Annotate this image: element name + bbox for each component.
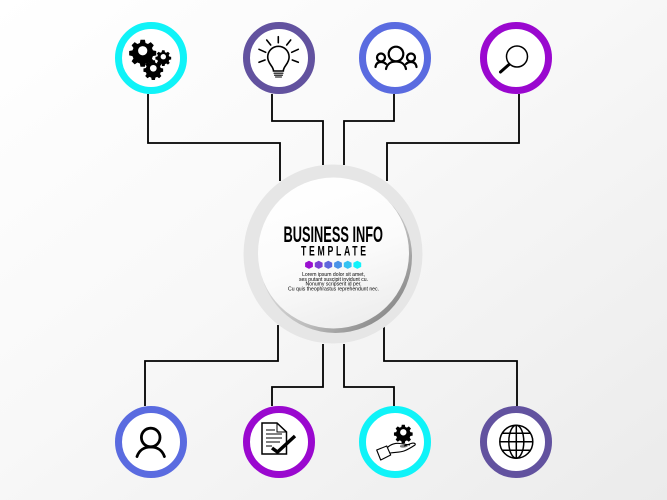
subtitle: TEMPLATE: [301, 244, 366, 259]
icon: people: [376, 47, 416, 69]
icon: magnifier: [500, 46, 528, 72]
icon: hand with gear: [377, 425, 415, 460]
icon: person: [137, 428, 164, 456]
body text: ses putant suscipit invidunt cu.: [299, 277, 368, 283]
icon: document with check: [262, 423, 295, 454]
icon: globe: [500, 425, 533, 458]
hexagon dots: [305, 261, 361, 269]
hub shadow crescent: [259, 180, 412, 333]
node: service: [362, 410, 428, 474]
node: document: [246, 410, 312, 474]
body text: Nonumy scripserit id per.: [305, 282, 362, 288]
title: BUSINESS INFO: [284, 222, 383, 247]
central hub: [244, 164, 422, 344]
icon: light bulb: [259, 37, 298, 77]
node: idea: [246, 26, 312, 90]
node: search: [484, 26, 548, 90]
node: gears: [118, 26, 184, 90]
outer hub ring: [244, 164, 422, 344]
node: user: [118, 410, 184, 474]
body text: Lorem ipsum dolor sit amet,: [302, 272, 365, 278]
body text: [288, 272, 379, 292]
node: globe: [484, 410, 548, 474]
connector lines: [145, 94, 519, 406]
icon: gears: [129, 40, 171, 80]
hub disc: [258, 178, 409, 328]
body text: Cu quis theophrastus reprehendunt nec.: [288, 286, 379, 292]
node: team: [362, 26, 428, 90]
